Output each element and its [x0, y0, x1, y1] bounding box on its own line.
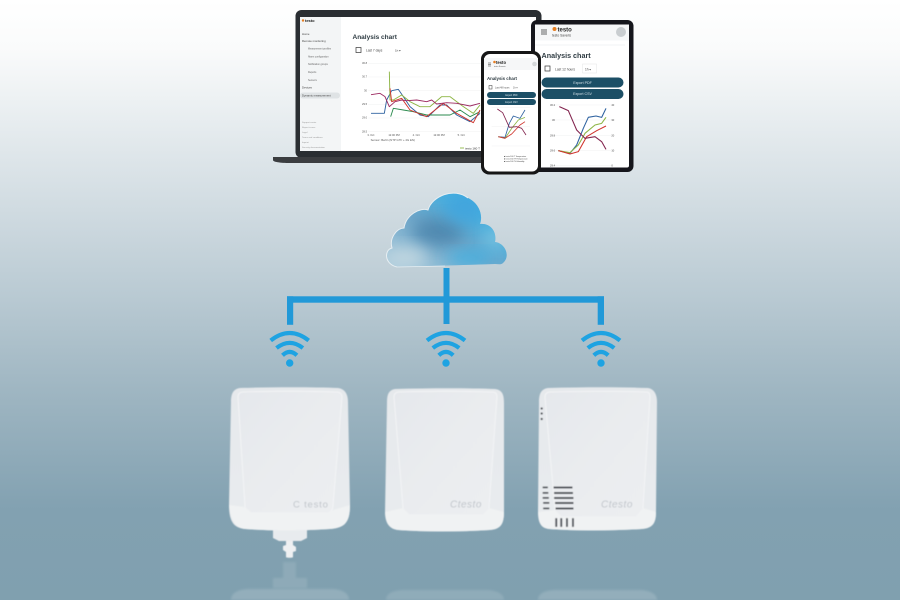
- cloud icon: [386, 192, 507, 268]
- laptop chart heading: Analysis chart: [352, 34, 398, 41]
- data logger 2: [385, 388, 504, 532]
- icon: wifi centre: [427, 333, 465, 367]
- phone header: testo Saveris: [494, 65, 506, 68]
- laptop sidebar: Sensors: [308, 79, 318, 82]
- laptop sidebar: [300, 17, 341, 151]
- laptop line chart: 12:00 PM: [388, 133, 400, 137]
- tablet date selector: [545, 64, 596, 73]
- phone date selector: [489, 86, 518, 90]
- network connector lines: [287, 268, 604, 325]
- laptop sidebar: Support center: [302, 121, 317, 124]
- phone chart legend: ■ testo 160 TH Temperature: [504, 158, 528, 160]
- laptop date selector: 1h ▾: [395, 48, 401, 52]
- laptop line chart: 5. Oct: [458, 133, 465, 137]
- laptop sidebar: Notification groups: [308, 63, 329, 66]
- probe connector: [273, 530, 307, 558]
- laptop sidebar: Devices: [302, 86, 313, 90]
- laptop line chart: 29.5: [362, 102, 368, 106]
- laptop sidebar: Measurement profiles: [308, 48, 332, 50]
- phone chart legend: ■ testo 160 TH Humidity: [504, 160, 524, 163]
- laptop sidebar: Report issues: [302, 126, 316, 129]
- tablet line chart: [550, 103, 615, 167]
- tablet export buttons: Export PDF: [573, 81, 593, 85]
- tablet line chart: 29.6: [550, 149, 556, 153]
- tablet line chart: 0: [611, 163, 613, 167]
- phone export buttons: [487, 92, 536, 105]
- laptop sidebar: Alarm configuration: [308, 56, 329, 58]
- laptop date selector: Last 7 days: [366, 48, 383, 52]
- tablet header: testo Saveris: [552, 34, 571, 38]
- laptop line chart: 3. Oct: [367, 133, 375, 137]
- laptop line chart: 28.5: [362, 129, 368, 133]
- laptop sidebar: Remote monitoring: [302, 39, 326, 43]
- tablet export buttons: [542, 78, 624, 99]
- phone date selector: 1h ▾: [513, 86, 518, 90]
- laptop line chart: 30: [364, 88, 367, 92]
- data logger 3 with vents: [538, 387, 657, 530]
- reflection of data loggers: [231, 562, 657, 600]
- laptop sidebar: Dynamic measurement: [302, 94, 331, 98]
- laptop line chart: 30.8: [362, 61, 368, 65]
- device logo: Ctesto: [450, 500, 482, 510]
- ventilation slots: [542, 486, 574, 527]
- laptop sidebar: Security documentation: [302, 146, 326, 149]
- laptop sidebar: Reports: [308, 71, 317, 74]
- tablet: [531, 20, 634, 172]
- phone chart legend: ■ testo 160 T Temperature: [504, 155, 526, 158]
- tablet header: testo: [558, 28, 572, 34]
- phone chart legend: [504, 155, 528, 163]
- device logo: C testo: [293, 500, 329, 510]
- tablet line chart: 29.4: [550, 163, 556, 167]
- laptop line chart: 12:00 PM: [433, 133, 445, 137]
- phone header: testo: [496, 60, 506, 65]
- laptop sidebar: testo: [305, 18, 315, 23]
- phone line chart: [492, 108, 530, 146]
- data logger 1 with probe connector: [229, 387, 350, 558]
- tablet date selector: Last 12 hours: [555, 68, 575, 72]
- laptop line chart: [362, 61, 483, 142]
- icon: wifi right: [582, 333, 620, 367]
- laptop sidebar: Home: [302, 32, 310, 36]
- tablet heading: Analysis chart: [542, 51, 591, 60]
- device logo: Ctesto: [601, 500, 633, 510]
- laptop sidebar: Imprint: [302, 141, 309, 144]
- tablet line chart: 29.8: [550, 133, 556, 137]
- phone export buttons: Export PDF: [505, 94, 518, 97]
- tablet export buttons: Export CSV: [573, 92, 592, 96]
- phone header: [484, 58, 538, 70]
- laptop line chart: 30.7: [362, 75, 368, 79]
- laptop line chart: 4. Oct: [413, 133, 420, 137]
- phone heading: Analysis chart: [487, 76, 518, 81]
- laptop line chart: Sensor: Berlin (NTP GTF + 4G EN): [371, 138, 415, 142]
- laptop sidebar: Legal: [302, 132, 308, 134]
- phone date selector: Last 48 hours: [495, 86, 510, 90]
- sensor dots: [541, 407, 543, 420]
- laptop date selector: [356, 48, 401, 52]
- laptop line chart: 29.0: [362, 116, 368, 120]
- icon: wifi left: [271, 333, 309, 367]
- tablet date selector: 1h ▾: [585, 68, 591, 72]
- laptop chart legend: testo 160 T: [465, 146, 480, 150]
- phone export buttons: Export CSV: [505, 101, 518, 104]
- tablet line chart: 20: [611, 133, 615, 137]
- phone: [481, 51, 541, 174]
- tablet header: [535, 24, 629, 45]
- tablet line chart: 30: [611, 118, 615, 122]
- tablet line chart: 40: [611, 103, 615, 107]
- laptop with analysis chart: [273, 10, 542, 163]
- tablet line chart: 30: [552, 118, 555, 122]
- tablet line chart: 10: [611, 149, 615, 153]
- tablet line chart: 30.2: [550, 103, 556, 107]
- laptop sidebar: Terms and conditions: [302, 136, 324, 139]
